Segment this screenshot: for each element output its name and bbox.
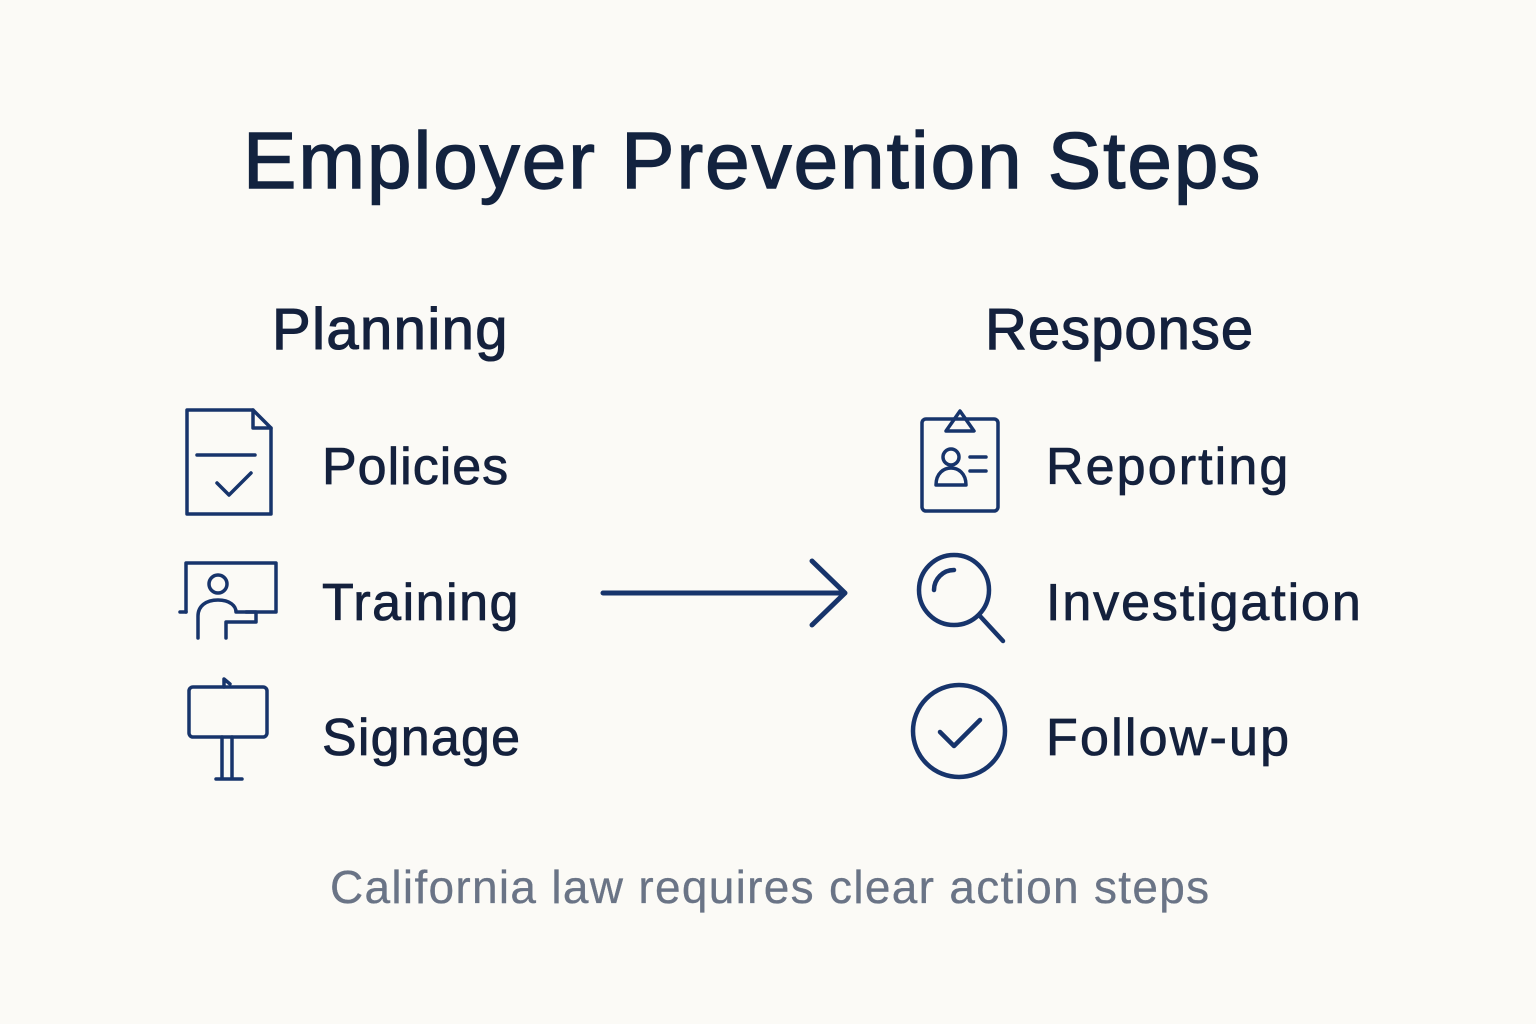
footer caption: California law requires clear action steps — [330, 861, 1210, 913]
label: Reporting: Reporting — [1046, 438, 1290, 496]
label: Training: Training — [322, 574, 520, 632]
icon: magnifier — [916, 552, 1006, 644]
icon: reporting clipboard — [920, 409, 1000, 513]
label: Follow-up: Follow-up — [1046, 709, 1291, 767]
label: Policies: Policies — [322, 438, 509, 496]
icon: training — [178, 561, 278, 640]
heading: Planning: Planning — [272, 297, 509, 362]
arrow — [600, 558, 848, 628]
heading: Response: Response — [985, 297, 1254, 362]
label: Investigation: Investigation — [1046, 574, 1363, 632]
icon: policies document — [185, 408, 273, 516]
title: Employer Prevention Steps — [243, 116, 1262, 205]
label: Signage: Signage — [322, 709, 521, 767]
icon: signage — [187, 677, 269, 781]
icon: checkmark circle — [910, 682, 1008, 780]
